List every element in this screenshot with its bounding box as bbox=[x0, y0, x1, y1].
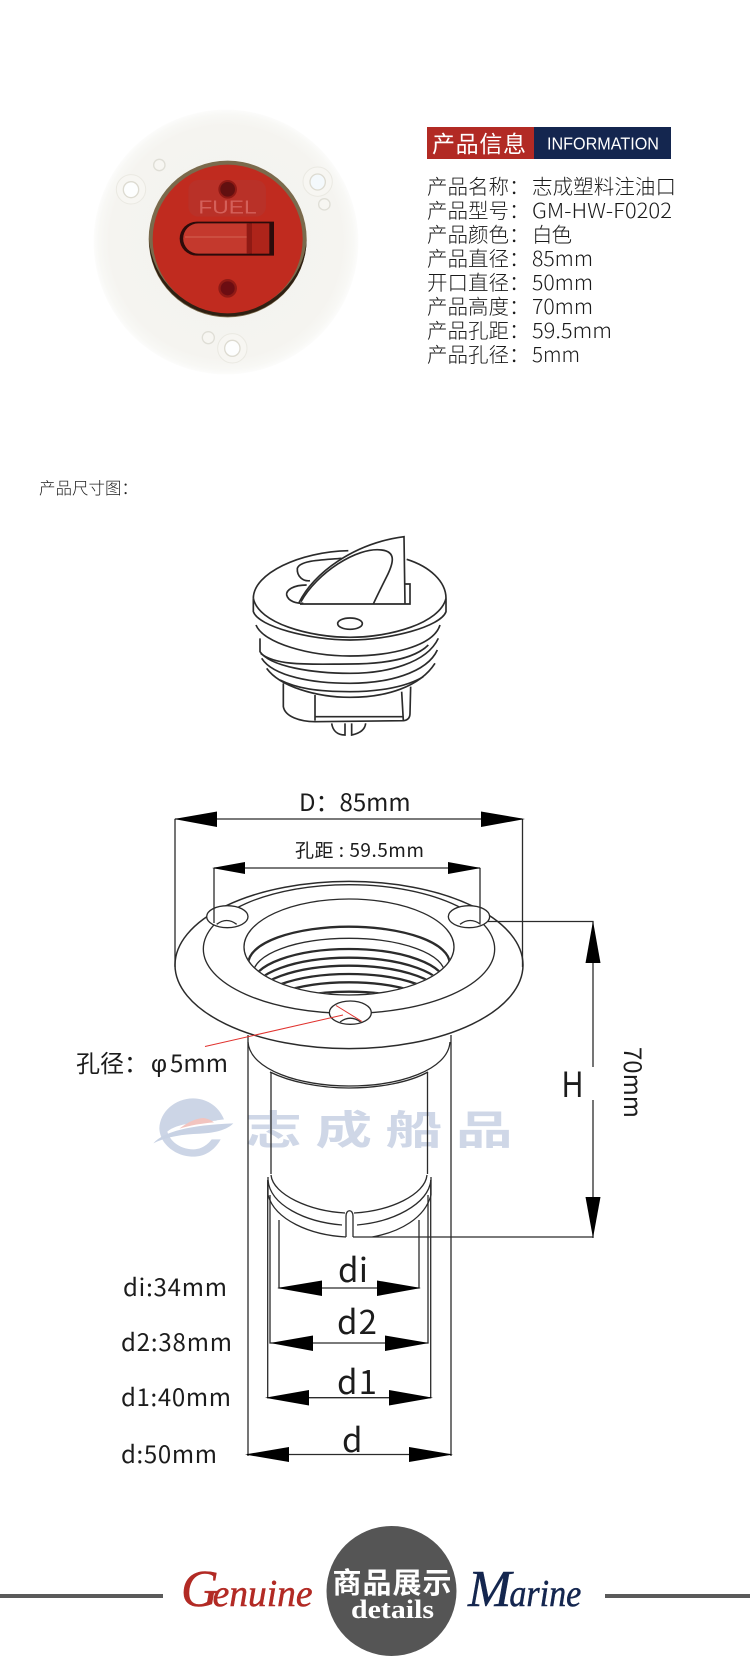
product spec list: 产品颜色： bbox=[427, 218, 530, 248]
icon: watermark logo bbox=[153, 1098, 233, 1157]
icon: cap hole top bbox=[218, 180, 237, 199]
dimension hole spacing 59.5mm bbox=[212, 836, 481, 923]
product spec list: 85mm bbox=[532, 242, 593, 272]
tube outer extension lines bbox=[248, 1035, 451, 1456]
divider bar right bbox=[605, 1594, 750, 1598]
dimension d: d bbox=[342, 1414, 362, 1462]
details badge: 商品展示 bbox=[332, 1560, 452, 1602]
flange collar bbox=[248, 1042, 450, 1086]
red fuel cap bbox=[149, 161, 307, 317]
icon: small dimples bbox=[154, 159, 330, 344]
watermark text: 志成船品 bbox=[245, 1098, 526, 1156]
product spec list bbox=[427, 170, 676, 368]
bore opening bbox=[244, 899, 454, 995]
dimension d bbox=[245, 1414, 453, 1462]
tube inner walls bbox=[271, 1072, 428, 1174]
product spec list: GM-HW-F0202 bbox=[532, 194, 672, 224]
product spec list: 白色 bbox=[532, 218, 572, 248]
details badge bbox=[326, 1526, 456, 1656]
dimension d1: d1 bbox=[337, 1356, 377, 1404]
height value 70mm: 70mm bbox=[617, 1047, 652, 1118]
product photo: white fuel deck fill with red cap bbox=[94, 110, 358, 374]
hole diameter label bbox=[76, 1044, 228, 1079]
line drawing: cap perspective view bbox=[253, 537, 446, 735]
icon: screw hole bottom bbox=[218, 334, 247, 363]
dimension di bbox=[277, 1220, 421, 1296]
dimension D: 85mm: D：85mm bbox=[299, 783, 411, 818]
product spec list: 产品型号： bbox=[427, 194, 530, 224]
product spec list: 志成塑料注油口 bbox=[532, 170, 676, 200]
line drawing: flange and tube with dimensions bbox=[76, 783, 652, 1470]
watermark: logo and brand name bbox=[153, 1098, 526, 1157]
product spec list: 产品孔径： bbox=[427, 338, 530, 368]
icon: cap hole bottom bbox=[218, 279, 237, 298]
information heading: INFORMATION bbox=[547, 134, 659, 154]
product spec list: 产品名称： bbox=[427, 170, 530, 200]
product spec list: 50mm bbox=[532, 266, 593, 296]
dimension H height bbox=[488, 921, 600, 1238]
product spec list: 产品孔距： bbox=[427, 314, 530, 344]
tube end ring with slot bbox=[268, 1175, 593, 1237]
left size legend bbox=[121, 1268, 232, 1470]
FUEL raised plate bbox=[188, 180, 266, 217]
left size legend: d:50mm bbox=[121, 1435, 217, 1470]
bore threads bbox=[248, 926, 450, 994]
dimension d2 bbox=[270, 1195, 429, 1351]
information heading: 产品信息 bbox=[432, 125, 526, 159]
mounting hole left bbox=[207, 906, 248, 928]
icon: screw hole left bbox=[116, 175, 146, 204]
dimension D: 85mm bbox=[174, 783, 525, 967]
cap handle slot bbox=[180, 222, 274, 256]
product spec list: 5mm bbox=[532, 338, 580, 368]
hole diameter label: φ bbox=[151, 1051, 167, 1078]
Marine script word: Marine bbox=[467, 1561, 581, 1618]
Genuine script word: Genuine bbox=[181, 1561, 313, 1618]
details badge: details bbox=[351, 1595, 434, 1624]
dimension d2: d2 bbox=[337, 1296, 377, 1344]
flange inner ring bbox=[203, 885, 495, 1013]
hole diameter label: 孔径： bbox=[76, 1044, 148, 1079]
mounting hole bottom bbox=[329, 1001, 371, 1024]
information heading bbox=[427, 125, 671, 159]
flange top view bbox=[175, 881, 523, 1049]
left size legend: d2:38mm bbox=[121, 1323, 232, 1358]
dimension d1 bbox=[265, 1180, 433, 1406]
dimension H height: H bbox=[562, 1064, 583, 1105]
product spec list: 59.5mm bbox=[532, 314, 612, 344]
mounting hole right bbox=[448, 906, 490, 928]
divider bar left bbox=[0, 1594, 163, 1598]
left size legend: d1:40mm bbox=[121, 1378, 231, 1413]
product spec list: 产品高度： bbox=[427, 290, 530, 320]
product spec list: 70mm bbox=[532, 290, 593, 320]
flange outer rim bbox=[175, 881, 523, 1049]
left size legend: di:34mm bbox=[123, 1268, 227, 1303]
dimension hole spacing 59.5mm: 孔距 : 59.5mm bbox=[295, 836, 424, 863]
size diagram label: 产品尺寸图： bbox=[39, 475, 138, 499]
icon: screw hole right bbox=[303, 167, 332, 196]
product spec list: 开口直径： bbox=[427, 266, 530, 296]
product spec list: 产品直径： bbox=[427, 242, 530, 272]
footer banner: details divider bbox=[0, 1526, 750, 1656]
red leader line for hole diameter bbox=[205, 1006, 362, 1046]
hole diameter label: 5mm bbox=[170, 1044, 228, 1079]
FUEL lettering: FUEL bbox=[198, 196, 257, 217]
dimension di: di bbox=[338, 1244, 368, 1292]
